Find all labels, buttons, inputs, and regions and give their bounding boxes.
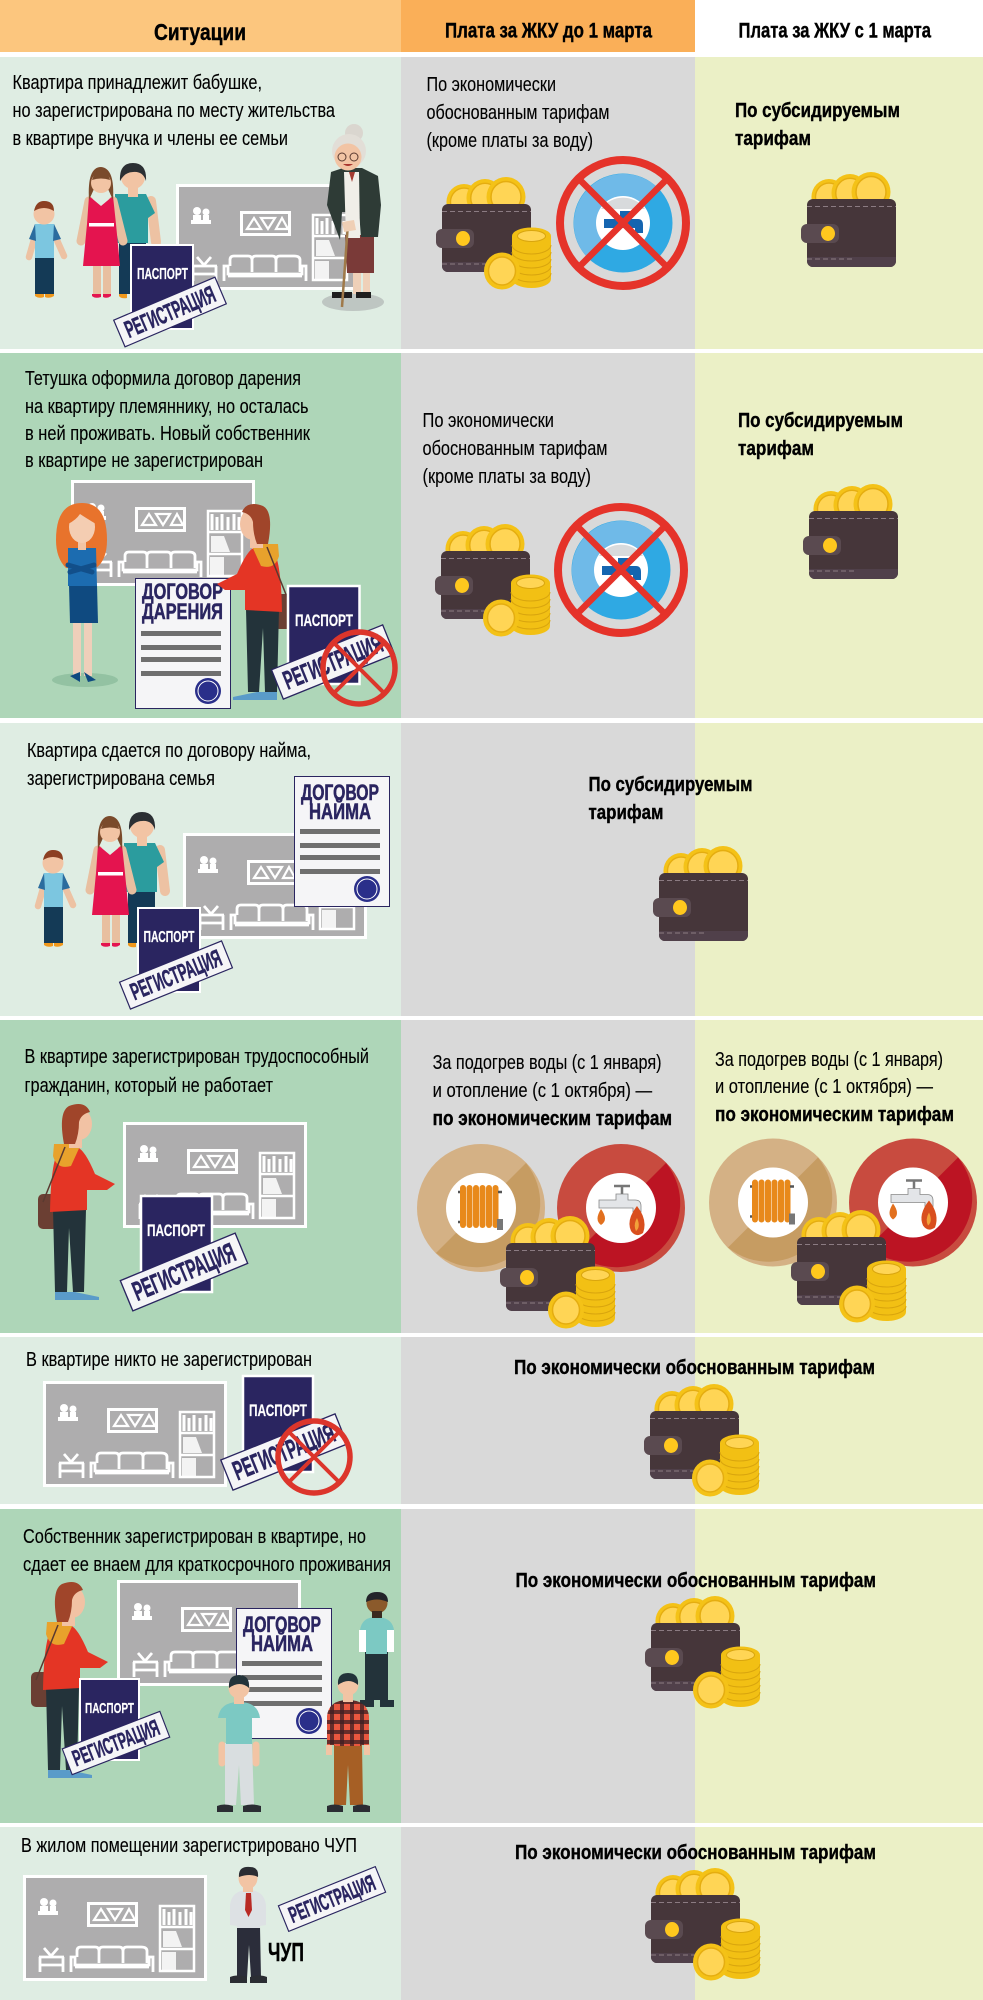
situation text	[27, 739, 311, 790]
row 2: gift contract	[25, 367, 903, 708]
icon: heating circle	[417, 1144, 545, 1272]
heading: before 1 March: Плата за ЖКУ до 1 марта	[445, 20, 652, 42]
icon: room	[184, 834, 366, 938]
header	[0, 0, 931, 52]
stamp: registration crossed	[221, 1414, 347, 1490]
text: before March tariff: (кроме платы за воду)	[426, 129, 593, 152]
text: after March tariff: тарифам	[738, 437, 814, 460]
situation text	[25, 367, 311, 472]
text: tariff: По экономически обоснованным тарифам	[514, 1356, 875, 1379]
stamp: registration	[62, 1711, 170, 1775]
icon: wallet and coins	[645, 1596, 760, 1708]
icon: passport	[288, 586, 360, 684]
text: before March tariff	[433, 1051, 672, 1130]
stamp: registration	[120, 1233, 248, 1311]
icon: room	[178, 186, 358, 288]
situation text	[12, 71, 335, 150]
icon: passport	[141, 1196, 212, 1292]
icon: passport	[131, 245, 193, 329]
text: before March tariff: (кроме платы за воду)	[422, 465, 591, 488]
situation text: в квартире не зарегистрирован	[25, 449, 263, 472]
text: before March tariff	[422, 409, 608, 488]
text: before March tariff	[426, 73, 610, 152]
icon: family	[29, 163, 156, 298]
situation text: Квартира принадлежит бабушке,	[12, 71, 262, 94]
icon: passport: ПАСПОРТ	[147, 1221, 205, 1240]
icon: hot water circle	[849, 1138, 977, 1266]
text: before March tariff: За подогрев воды (с 1 января)	[433, 1051, 662, 1074]
icon: wallet and coins	[644, 1384, 759, 1496]
icon: passport: ПАСПОРТ	[249, 1401, 307, 1420]
row 4: unemployed able-bodied citizen	[24, 1045, 977, 1328]
text: before March tariff: по экономическим тарифам	[433, 1107, 672, 1130]
icon: passport	[138, 908, 200, 992]
text: tariff across both columns: тарифам	[588, 801, 664, 824]
icon: gift contract: ДАРЕНИЯ	[142, 599, 223, 624]
row 7: private enterprise registered	[21, 1834, 876, 1983]
situation text: в ней проживать. Новый собственник	[25, 422, 311, 445]
icon: room	[72, 482, 254, 584]
situation text: Тетушка оформила договор дарения	[25, 367, 301, 390]
icon: gift contract	[136, 578, 230, 708]
icon: wallet and coins	[436, 177, 551, 290]
stamp: registration: РЕГИСТРАЦИЯ	[285, 1869, 379, 1928]
icon: room	[118, 1582, 300, 1684]
row 5: nobody registered	[26, 1348, 875, 1496]
stamp: registration: РЕГИСТРАЦИЯ	[69, 1714, 163, 1771]
text: after March tariff: тарифам	[735, 127, 811, 150]
icon: room	[44, 1382, 226, 1486]
heading: situations: Ситуации	[154, 19, 246, 45]
stamp: registration crossed	[271, 625, 395, 699]
row 6: owner rents out short term	[23, 1525, 876, 1812]
icon: wallet and coins	[645, 1868, 760, 1980]
text: after March tariff	[738, 409, 903, 460]
situation text: В квартире никто не зарегистрирован	[26, 1348, 312, 1371]
text: before March tariff: По экономически	[422, 409, 554, 432]
icon: no water	[558, 507, 684, 633]
text: before March tariff: обоснованным тарифам	[422, 437, 608, 460]
icon: tenant in teal shirt	[217, 1675, 261, 1812]
icon: wallet and coins	[500, 1216, 615, 1328]
icon: wallet and coins	[435, 524, 550, 636]
situation text: в квартире внучка и члены ее семьи	[12, 127, 288, 150]
text: after March tariff	[715, 1048, 954, 1126]
heading: after 1 March: Плата за ЖКУ с 1 марта	[738, 20, 931, 42]
stamp: registration	[278, 1867, 386, 1931]
text: tariff: По экономически обоснованным тарифам	[516, 1569, 876, 1592]
situation text	[24, 1045, 369, 1097]
icon: hot water circle	[557, 1144, 685, 1272]
icon: family	[38, 812, 165, 947]
icon: rent contract: ДОГОВОР	[243, 1612, 321, 1637]
icon: passport: ПАСПОРТ	[137, 266, 188, 283]
stamp: registration	[120, 941, 232, 1009]
text: before March tariff: и отопление (с 1 октября) —	[433, 1079, 653, 1102]
text: before March tariff: обоснованным тарифам	[426, 101, 610, 124]
text: after March tariff: По субсидируемым	[735, 99, 900, 122]
stamp: registration	[114, 277, 226, 347]
icon: no water	[560, 160, 686, 286]
icon: rent contract: НАЙМА	[251, 1631, 313, 1656]
text: after March tariff: и отопление (с 1 октября) —	[715, 1075, 933, 1098]
situation text: гражданин, который не работает	[24, 1074, 273, 1097]
text: tariff across both columns: По субсидируемым	[588, 773, 752, 796]
icon: room	[124, 1124, 306, 1226]
icon: aunt	[52, 503, 118, 687]
row 3: rent contract with family registered	[27, 739, 752, 1009]
icon: wallet	[801, 172, 896, 267]
icon: man in red hoodie	[38, 1104, 115, 1300]
stamp: registration crossed: РЕГИСТРАЦИЯ	[229, 1418, 339, 1486]
icon: passport	[80, 1679, 139, 1760]
icon: room	[24, 1876, 206, 1980]
situation text: но зарегистрирована по месту жительства	[12, 99, 335, 122]
situation text: Собственник зарегистрирован в квартире, но	[23, 1525, 366, 1548]
icon: man in red hoodie	[31, 1582, 108, 1778]
text: after March tariff: По субсидируемым	[738, 409, 903, 432]
situation text: В жилом помещении зарегистрировано ЧУП	[21, 1834, 357, 1857]
icon: man in red hoodie	[217, 504, 294, 700]
label: ЧУП: ЧУП	[268, 1937, 304, 1967]
row 1: grandmother's flat, registered family	[12, 71, 900, 347]
icon: rent contract: НАЙМА	[309, 799, 371, 824]
icon: wallet	[653, 846, 748, 941]
situation text	[23, 1525, 391, 1576]
icon: grandmother	[322, 124, 384, 311]
stamp: registration: РЕГИСТРАЦИЯ	[128, 1236, 240, 1307]
icon: wallet	[803, 484, 898, 579]
stamp: registration: РЕГИСТРАЦИЯ	[127, 945, 226, 1006]
text: tariff: По экономически обоснованным тарифам	[515, 1841, 876, 1864]
icon: passport	[243, 1376, 313, 1472]
icon: gift contract: ДОГОВОР	[142, 579, 223, 604]
icon: rent contract: ДОГОВОР	[301, 780, 379, 805]
icon: no sign	[278, 1421, 350, 1493]
icon: tenant in plaid shirt	[327, 1673, 370, 1812]
situation text: на квартиру племяннику, но осталась	[25, 395, 308, 418]
situation text: Квартира сдается по договору найма,	[27, 739, 311, 762]
stamp: registration crossed: РЕГИСТРАЦИЯ	[279, 628, 387, 695]
icon: passport: ПАСПОРТ	[295, 611, 353, 630]
icon: passport: ПАСПОРТ	[144, 929, 195, 946]
icon: wallet and coins	[791, 1210, 906, 1322]
situation text: В квартире зарегистрирован трудоспособный	[24, 1045, 369, 1068]
icon: businessman	[230, 1867, 267, 1983]
icon: no sign	[323, 632, 395, 704]
icon: tenant with dark skin	[359, 1592, 394, 1707]
situation text: зарегистрирована семья	[27, 767, 215, 790]
text: tariff across both columns	[588, 773, 752, 824]
stamp: registration: РЕГИСТРАЦИЯ	[121, 281, 220, 344]
icon: passport: ПАСПОРТ	[85, 1700, 134, 1717]
icon: rent contract	[294, 776, 390, 906]
icon: heating circle	[709, 1138, 837, 1266]
situation text: сдает ее внаем для краткосрочного проживания	[23, 1553, 391, 1576]
text: before March tariff: По экономически	[426, 73, 556, 96]
text: after March tariff	[735, 99, 900, 150]
icon: rent contract	[236, 1608, 332, 1738]
